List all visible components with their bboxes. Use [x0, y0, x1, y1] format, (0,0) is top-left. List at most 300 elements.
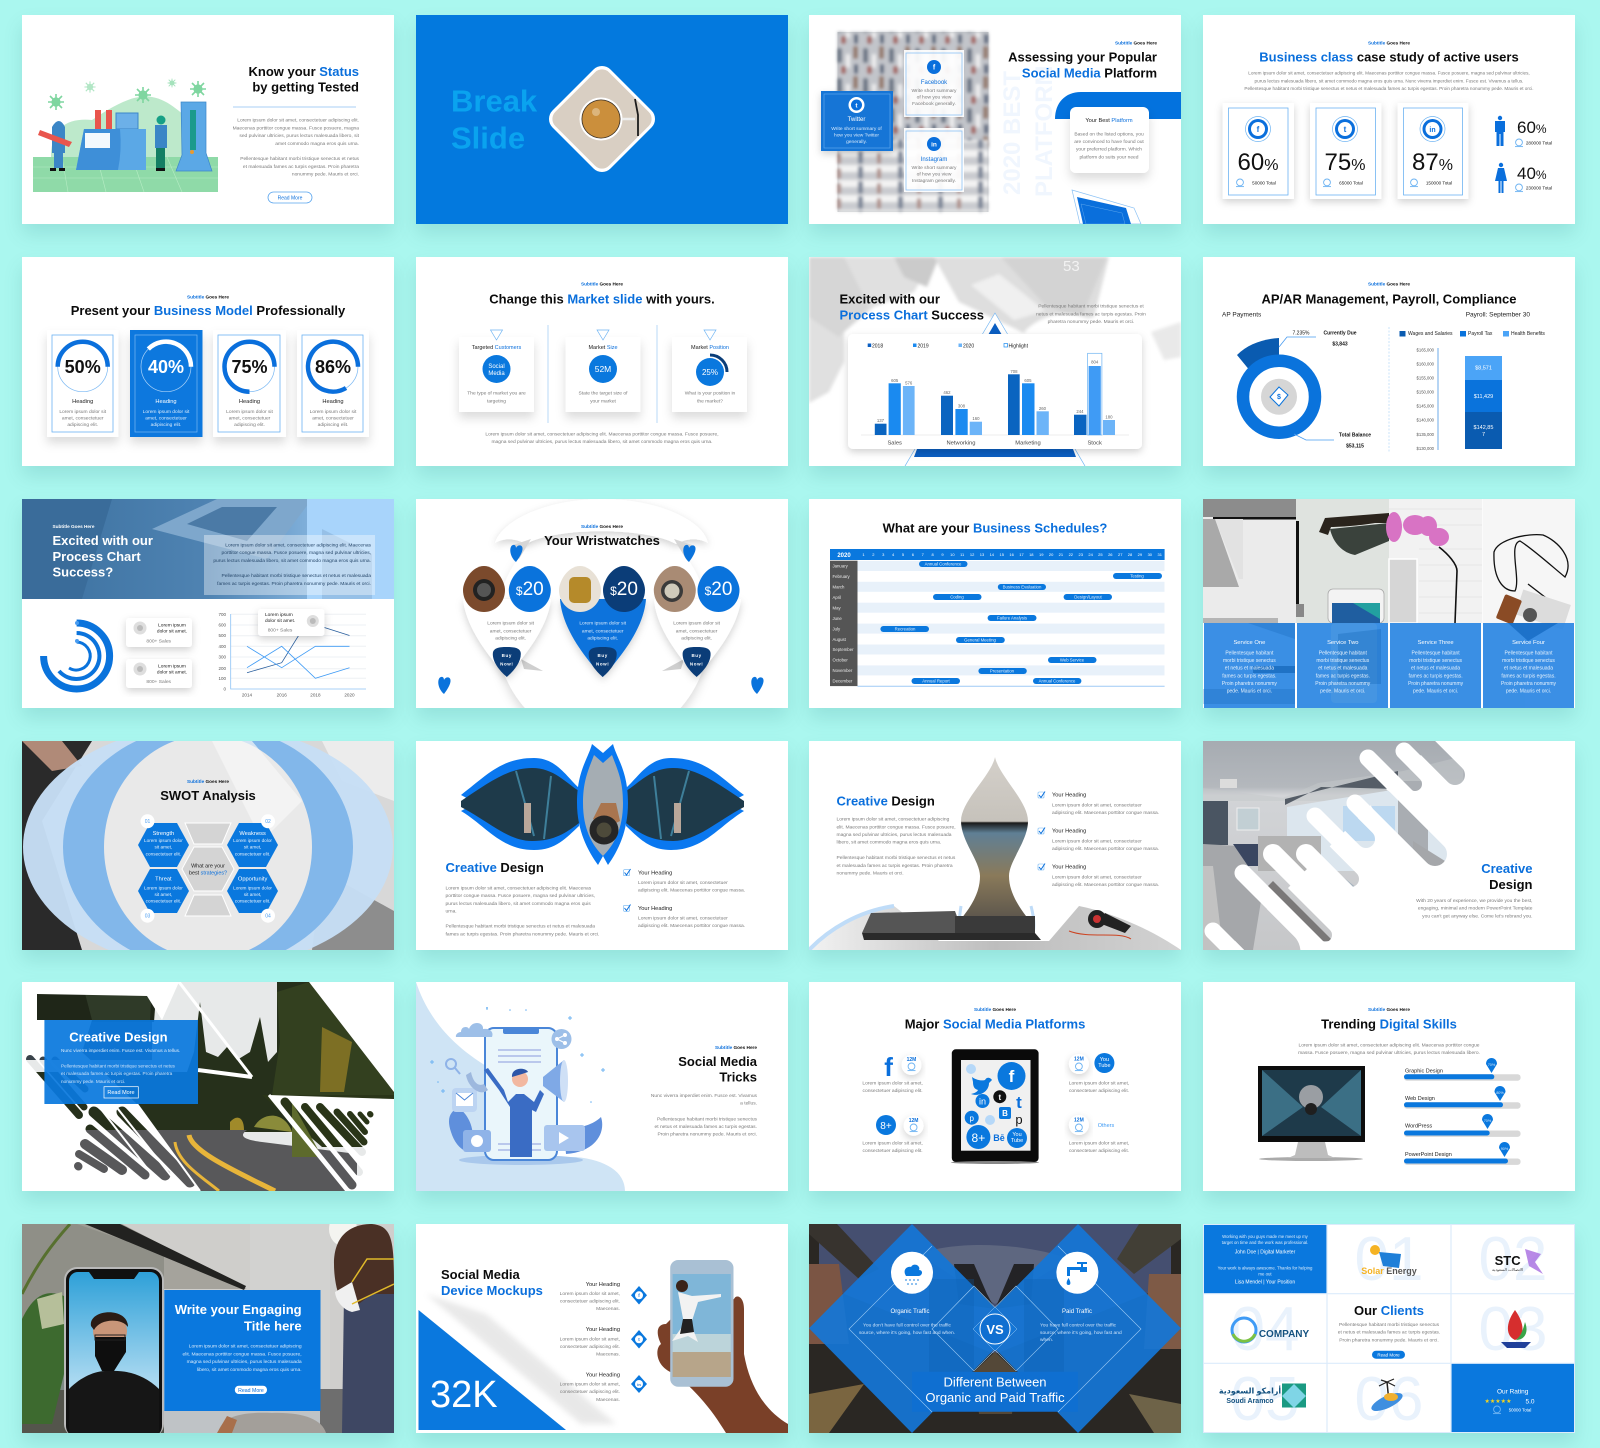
testimonial tile: Your work is always awesome. Thanks for helping	[1218, 1266, 1313, 1270]
gantt chart: 3	[882, 552, 885, 557]
gantt chart: 28	[1128, 552, 1133, 557]
gantt chart	[830, 549, 1165, 686]
body text	[446, 886, 599, 938]
card: facebook: Write short summary	[911, 88, 957, 94]
gantt chart: October	[832, 658, 848, 662]
body text: Pellentesque habitant morbi tristique senectus et netus et malesuada fames ac turpis egestas. Proin pharetra nonummy pede. Mauris et orci.	[1244, 86, 1534, 91]
product: right watch: Buy	[691, 653, 702, 658]
donut chart: $	[1277, 394, 1281, 401]
item: youtube	[1069, 1053, 1129, 1094]
line chart: 600	[218, 622, 226, 628]
bar chart: Sales	[887, 440, 902, 446]
skill bars: WordPress	[1405, 1124, 1432, 1130]
concentric ellipses	[23, 725, 393, 969]
card: 86%: adipiscing elit.	[318, 422, 348, 428]
card: 75%: amet, consectetuer	[229, 416, 271, 422]
card: twitter 75%	[1310, 103, 1382, 199]
panel: popular social media	[809, 15, 1181, 224]
item: three: in	[637, 1382, 641, 1387]
body text: pharetra nonummy pede. Mauris et orci.	[1048, 319, 1134, 325]
title: Creative Design	[836, 794, 935, 808]
gantt chart: November	[832, 668, 853, 673]
skill bars: 90%	[1501, 1147, 1509, 1151]
background curve	[416, 982, 625, 1191]
item: youtube: 12M	[1074, 1056, 1084, 1062]
stacked bar chart	[1400, 331, 1545, 451]
header text: Subtitle Goes Here	[52, 524, 95, 529]
text box: Pellentesque habitant morbi tristique senectus et netus et malesuada	[221, 573, 371, 579]
body text: Maecenas porttitor congue massa. Fusce posuere, magna	[233, 126, 359, 132]
stacked bar chart: $135,000	[1417, 432, 1435, 437]
testimonial tile: John Doe | Digital Marketer	[1235, 1250, 1296, 1256]
card: your best platform: Based on the listed options, you	[1074, 132, 1144, 138]
item: others	[1069, 1115, 1129, 1154]
logo: flame	[1501, 1310, 1531, 1348]
gantt chart: Annual Report	[922, 678, 951, 684]
bar chart: 308	[958, 404, 966, 408]
title	[840, 292, 984, 322]
card: 86%: 86%	[315, 357, 351, 377]
card: market position: What is your position in	[685, 390, 736, 396]
item: facebook: 12M	[907, 1057, 916, 1063]
card: facebook	[904, 50, 964, 117]
panel: organic vs paid traffic	[809, 1224, 1181, 1433]
gantt chart: 7	[922, 552, 925, 557]
body text: Pellentesque habitant morbi tristique senectus et netus	[836, 855, 956, 861]
text box: Nunc viverra imperdiet enim. Fusce est. Vivamus a tellus.	[61, 1048, 180, 1053]
body text: et netus et malesuada fames ac turpis egestas.	[654, 1124, 757, 1130]
text: organic traffic	[859, 1309, 955, 1336]
panel: your wristwatches	[416, 499, 788, 708]
body text	[651, 1093, 758, 1138]
line chart: 800+ Sales	[268, 628, 293, 634]
card: twitter: t	[855, 102, 858, 110]
checklist: Lorem ipsum dolor sit amet, consectetuer	[638, 880, 728, 886]
service columns: et netus et malesuada	[1225, 666, 1274, 672]
product: left watch: adipiscing elit.	[495, 636, 526, 642]
gantt chart: 1	[862, 552, 865, 557]
line chart: 0	[223, 686, 226, 692]
text box	[44, 1020, 198, 1104]
gantt chart: February	[832, 574, 851, 579]
product: left watch	[463, 566, 551, 677]
tablet with icons: f	[1009, 1067, 1015, 1086]
tablet with icons: B	[1002, 1109, 1008, 1118]
title: Creative	[1481, 861, 1532, 876]
masked room photo	[1203, 741, 1465, 950]
photo: building	[1203, 499, 1296, 623]
panel: process chart success	[809, 257, 1181, 466]
body text: netus et malesuada fames ac turpis egestas. Proin	[1036, 312, 1146, 318]
card: instagram: Instagram	[921, 157, 947, 163]
body text	[1298, 1042, 1480, 1056]
item: one: Maecenas.	[596, 1306, 620, 1312]
hex grid: 03	[145, 914, 150, 920]
body text: Pellentesque habitant morbi tristique senectus et netus	[240, 156, 360, 162]
title: Assessing your Popular	[1008, 50, 1157, 64]
our clients text: Our Clients	[1354, 1303, 1424, 1318]
line chart: 2014	[242, 692, 253, 698]
item: two	[560, 1327, 647, 1358]
body text	[233, 118, 360, 178]
heading: Break	[451, 84, 538, 118]
hex grid: 04	[265, 914, 271, 920]
title: Major Social Media Platforms	[905, 1016, 1085, 1032]
bar chart: 804	[1091, 360, 1099, 364]
item: youtube: Tube	[1098, 1063, 1111, 1069]
bar chart: 2018	[872, 343, 883, 349]
item: one: f	[638, 1293, 640, 1298]
butterfly photo shape	[461, 744, 744, 865]
tablet with icons: 8+	[972, 1131, 985, 1145]
card: stat two: Lorem ipsum	[158, 664, 186, 670]
card: 50%: Lorem ipsum dolor sit	[59, 409, 107, 415]
gantt chart: 14	[990, 552, 995, 557]
bar chart: 576	[905, 380, 913, 386]
tablet with icons: Tube	[1011, 1138, 1023, 1144]
testimonial tile: Lisa Mendel | Your Position	[1235, 1280, 1295, 1286]
item: others: Others	[1098, 1123, 1114, 1129]
title: SWOT Analysis	[160, 788, 256, 803]
text box: Lorem ipsum dolor sit amet, consectetuer adipiscing	[189, 1344, 302, 1350]
card: 50%	[47, 330, 118, 437]
background circle shapes	[495, 499, 710, 744]
card: facebook: Facebook generally.	[912, 101, 956, 107]
product: centre watch: amet, consectetuer	[582, 628, 624, 634]
gantt chart: June	[832, 616, 842, 621]
service columns: Pellentesque habitant	[1504, 650, 1553, 656]
body text: elit. Maecenas porttitor congue massa. Fusce posuere,	[836, 824, 956, 830]
card: twitter: how you view Twitter	[834, 132, 879, 138]
service columns: Service Two	[1327, 640, 1359, 646]
item: one: Your Heading	[586, 1282, 620, 1288]
stacked bar chart: $8,571	[1475, 366, 1492, 372]
gantt chart: May	[832, 606, 841, 610]
card: 86%: amet, consectetuer	[312, 416, 354, 422]
service columns: morbi tristique senectus	[1223, 658, 1276, 664]
bar chart: 708	[1010, 369, 1018, 374]
gantt chart: 23	[1078, 552, 1084, 557]
item: others: 12M	[1074, 1118, 1084, 1124]
title: What are your Business Schedules?	[883, 520, 1107, 536]
line chart: 300	[218, 654, 226, 660]
checklist: Your Heading	[1052, 792, 1086, 798]
card: facebook 60%: f	[1257, 125, 1260, 134]
gantt chart: Testing	[1130, 574, 1144, 578]
item: others: consectetuer adipiscing elit.	[1069, 1148, 1129, 1154]
title	[544, 524, 660, 548]
testimonial tile	[1203, 1224, 1327, 1294]
title	[925, 1374, 1065, 1405]
heading: Slide	[451, 120, 525, 156]
gantt chart: 21	[1059, 552, 1064, 557]
hex grid: What are your	[191, 864, 225, 870]
service columns: pede. Mauris et orci.	[1320, 689, 1365, 695]
checklist: Your Heading	[638, 870, 672, 876]
background photo: 53	[1063, 258, 1080, 275]
card: market position: 25%	[702, 368, 718, 377]
text: paid traffic: Paid Traffic	[1062, 1309, 1092, 1315]
diamonds	[809, 1224, 1181, 1433]
card: 75%: 75%	[231, 357, 268, 377]
grid numbers: 05	[1231, 1365, 1299, 1433]
product: centre watch: Buy	[598, 653, 608, 658]
card: 86%: Heading	[322, 399, 344, 405]
card: stat two: 800+ Sales	[146, 679, 172, 685]
bar chart: 180	[1105, 414, 1113, 420]
body text	[1416, 898, 1533, 920]
gantt chart: 30	[1148, 552, 1153, 557]
gantt chart: July	[832, 626, 841, 632]
skill bars: 70%	[1488, 1063, 1496, 1067]
item: facebook: Lorem ipsum dolor sit amet,	[862, 1080, 923, 1086]
skill bars	[1404, 1058, 1521, 1165]
hex grid: 01	[145, 819, 150, 825]
hex grid: sit amet,	[244, 892, 261, 897]
body text: With 20 years of experience, we provide you the best,	[1416, 898, 1532, 904]
card: facebook 60%	[1222, 103, 1294, 199]
stacked bar chart: Payroll Tax	[1468, 331, 1493, 337]
card: facebook: Facebook	[921, 80, 948, 86]
gantt chart: 4	[892, 552, 895, 557]
card: 50%: Heading	[72, 399, 93, 405]
tablet with icons: You	[1012, 1132, 1022, 1138]
body text	[836, 816, 956, 876]
logo: palm	[1369, 1379, 1405, 1415]
line chart: Lorem ipsum	[265, 612, 293, 618]
panel: swot analysis	[22, 741, 394, 950]
bar chart: 137	[877, 418, 885, 423]
hex grid: sit amet,	[155, 844, 172, 850]
title: Subtitle Goes Here	[1368, 282, 1410, 286]
bar chart: 462	[943, 390, 951, 395]
body text	[1244, 70, 1534, 91]
subheads: Payroll: September 30	[1466, 312, 1530, 318]
checklist	[624, 869, 745, 929]
title: Social Media	[441, 1267, 521, 1282]
title: Business class case study of active users	[1259, 50, 1519, 64]
card: linkedin 87%: 87%	[1412, 149, 1453, 176]
title: Change this Market slide with yours.	[489, 292, 715, 306]
gantt chart: 13	[980, 552, 985, 557]
title	[905, 1007, 1085, 1032]
card: instagram: in	[931, 142, 937, 148]
panel: trending digital skills	[1203, 982, 1575, 1191]
testimonial tile: target on time and the work was professional.	[1222, 1240, 1308, 1245]
stacked bar chart: $142,85	[1474, 425, 1493, 431]
card: your best platform: are convinced to have found out	[1074, 139, 1144, 145]
title: Organic and Paid Traffic	[925, 1390, 1065, 1405]
logo: stc: الاتصالات السعودية	[1492, 1267, 1523, 1272]
logo: stc	[1492, 1249, 1543, 1274]
checklist: adipiscing elit. Maecenas porttitor congue massa.	[638, 923, 745, 929]
service columns: fames ac turpis egestas.	[1501, 674, 1556, 680]
rating tile: 5.0	[1525, 1398, 1535, 1406]
text: paid traffic: when.	[1040, 1337, 1053, 1343]
tablet with icons: t	[998, 1093, 1001, 1102]
stacked bar chart: $155,000	[1417, 376, 1435, 380]
product: left watch: Lorem ipsum dolor sit	[487, 620, 535, 626]
card: facebook 60%: 50000 Total	[1252, 180, 1276, 186]
stacked bar chart: 7	[1482, 432, 1485, 438]
item: three: consectetuer adipiscing elit.	[560, 1389, 620, 1395]
donut chart: $3,843	[1332, 342, 1348, 348]
gantt chart: December	[832, 678, 853, 684]
title	[1261, 282, 1517, 306]
service columns	[1203, 623, 1574, 708]
title: Know your Status	[248, 64, 359, 79]
card: 75%: Lorem ipsum dolor sit	[226, 409, 274, 415]
checklist: Your Heading	[638, 906, 672, 912]
illustration: phone and person	[430, 1007, 605, 1165]
stacked bar chart: $11,429	[1474, 394, 1493, 400]
gantt chart: 24	[1088, 552, 1094, 557]
text: organic traffic: source, where it's going, how fast and when.	[859, 1330, 955, 1336]
card: stat one: 800+ Sales	[146, 638, 172, 644]
stat: women 40%: 40%	[1517, 164, 1547, 183]
gantt chart: August	[832, 637, 847, 642]
title: Your Wristwatches	[544, 533, 660, 548]
panel: business class case study	[1203, 15, 1575, 224]
title: Process Chart Success	[840, 308, 984, 322]
text box: libero, sit amet commodo magna eros quis urna.	[197, 1367, 302, 1373]
gantt chart: April	[832, 595, 841, 600]
card: market position: the market?	[697, 398, 723, 404]
gantt chart: 2020	[837, 553, 851, 559]
heading	[451, 84, 538, 156]
title: Subtitle Goes Here	[1115, 40, 1157, 46]
photo: camera	[1483, 499, 1575, 630]
title	[71, 294, 346, 318]
item: google plus: Lorem ipsum dolor sit amet,	[862, 1140, 923, 1146]
text box: Title here	[244, 1318, 302, 1334]
card: market position	[672, 330, 747, 412]
bar chart: Stock	[1087, 440, 1102, 446]
hex grid: 02	[265, 819, 271, 825]
body text: nonummy pede. Mauris et orci.	[292, 172, 359, 178]
body text: Proin pharetra nonummy pede. Mauris et orci.	[658, 1132, 757, 1138]
image: coffee cup diamond	[544, 61, 660, 177]
card: twitter 75%: 75%	[1325, 149, 1365, 176]
skill bars: Graphic Design	[1405, 1068, 1443, 1074]
grid numbers: 02	[1479, 1225, 1547, 1294]
masked road photo	[22, 982, 394, 1191]
panel: break slide	[416, 15, 788, 224]
item: three: Maecenas.	[596, 1397, 620, 1403]
skill bars: 80%	[1496, 1091, 1504, 1095]
body text: Nunc viverra imperdiet enim. Fusce est. Vivamus	[651, 1093, 758, 1099]
item: two: Your Heading	[586, 1327, 620, 1333]
service columns: Proin pharetra nonummy	[1501, 681, 1557, 687]
body text: porttitor congue massa. Fusce posuere, magna sed pulvinar ultricies,	[446, 893, 595, 899]
item: facebook: consectetuer adipiscing elit.	[863, 1088, 923, 1094]
title	[1008, 40, 1157, 80]
body text: sed pulvinar ultricies, purus lectus malesuada libero, sit	[239, 133, 360, 139]
card: linkedin 87%: in	[1429, 127, 1436, 134]
stacked bar chart: $145,000	[1417, 404, 1435, 408]
gantt chart: Business Evaluation	[1003, 584, 1042, 590]
text box: et malesuada fames ac turpis egestas. Proin pharetra	[61, 1071, 173, 1076]
card: twitter 75%: t	[1344, 125, 1347, 134]
product: left watch: $20	[516, 579, 544, 600]
panel: major social media platforms	[809, 982, 1181, 1191]
service columns: fames ac turpis egestas.	[1316, 674, 1370, 680]
grid numbers	[1231, 1225, 1547, 1434]
gantt chart: Web Service	[1060, 658, 1085, 662]
grid numbers: 03	[1479, 1295, 1547, 1364]
text box: Write your Engaging	[175, 1302, 302, 1317]
our clients text: Read More	[1377, 1352, 1400, 1358]
body text: amet commodo magna eros quis urna.	[275, 141, 359, 147]
item: one: consectetuer adipiscing elit.	[560, 1298, 620, 1304]
our clients text: et netus et malesuada fames ac turpis egestas.	[1338, 1330, 1440, 1336]
rating tile	[1451, 1363, 1575, 1433]
gantt chart: 17	[1019, 552, 1024, 557]
donut chart: Currently Due	[1323, 330, 1357, 336]
body text: magna sed pulvinar ultricies, purus lectus malesuada libero, sit amet commodo magna eros quis urna.	[491, 439, 713, 445]
item: three: Lorem ipsum dolor sit amet,	[560, 1382, 620, 1388]
checklist: Your Heading	[1052, 828, 1086, 834]
product: right watch: amet, consectetuer	[676, 628, 718, 634]
service columns: morbi tristique senectus	[1316, 658, 1370, 664]
title	[160, 779, 256, 803]
gantt chart: 5	[902, 552, 905, 557]
body text: Lorem ipsum dolor sit amet, consectetuer adipiscing elit. Maecenas	[446, 886, 592, 892]
gantt chart: 20	[1049, 552, 1054, 557]
title	[1321, 1007, 1457, 1032]
card: 86%: Lorem ipsum dolor sit	[310, 409, 357, 415]
hex grid: consectetuer elit.	[146, 898, 181, 904]
text box: purus lectus malesuada libero, sit amet commodo magna eros quis urna.	[213, 558, 371, 564]
hex grid: sit amet,	[155, 892, 172, 897]
hex grid: Weakness	[239, 831, 266, 837]
panel: services with photos	[1203, 499, 1575, 708]
service columns: Proin pharetra nonummy	[1222, 681, 1277, 687]
icon: cloud	[891, 1252, 933, 1294]
title: Subtitle Goes Here	[974, 1007, 1016, 1012]
our clients text: Proin pharetra nonummy pede. Mauris et orci.	[1339, 1338, 1439, 1344]
card: market size	[566, 330, 640, 412]
title: by getting Tested	[252, 80, 359, 94]
item: google plus	[862, 1115, 924, 1154]
panel: our clients	[1203, 1224, 1575, 1433]
background photo	[809, 257, 1181, 466]
skill bars: 70%	[1484, 1119, 1492, 1123]
text: paid traffic: You have full control over the traffic	[1040, 1322, 1117, 1328]
icon: tap	[1056, 1252, 1098, 1294]
item: two: t	[638, 1337, 640, 1342]
card: targeted customers: targeting	[487, 398, 506, 404]
card: stat two: dolor sit amet.	[157, 670, 187, 676]
hex grid: Lorem ipsum dolor	[233, 886, 272, 890]
card: targeted customers: Media	[488, 371, 505, 377]
service columns: fames ac turpis egestas.	[1408, 674, 1463, 680]
text box: Read More	[238, 1388, 264, 1394]
text box: Pellentesque habitant morbi tristique senectus et netus	[61, 1064, 176, 1068]
panel: market slide	[416, 257, 788, 466]
text box: nonummy pede. Mauris et orci.	[61, 1079, 125, 1084]
checklist: Your Heading	[1052, 864, 1086, 870]
gantt chart: Annual Conference	[1039, 678, 1076, 684]
service columns: pede. Mauris et orci.	[1506, 689, 1551, 695]
tablet with icons: p	[969, 1114, 974, 1123]
hex grid: Opportunity	[238, 876, 267, 882]
card: facebook: of how you view	[917, 94, 952, 100]
hex grid: consectetuer elit.	[146, 852, 181, 856]
bar chart: 260	[1039, 406, 1047, 411]
item: google plus: 8+	[880, 1121, 892, 1132]
photo: sunglasses and phone	[1296, 499, 1389, 623]
